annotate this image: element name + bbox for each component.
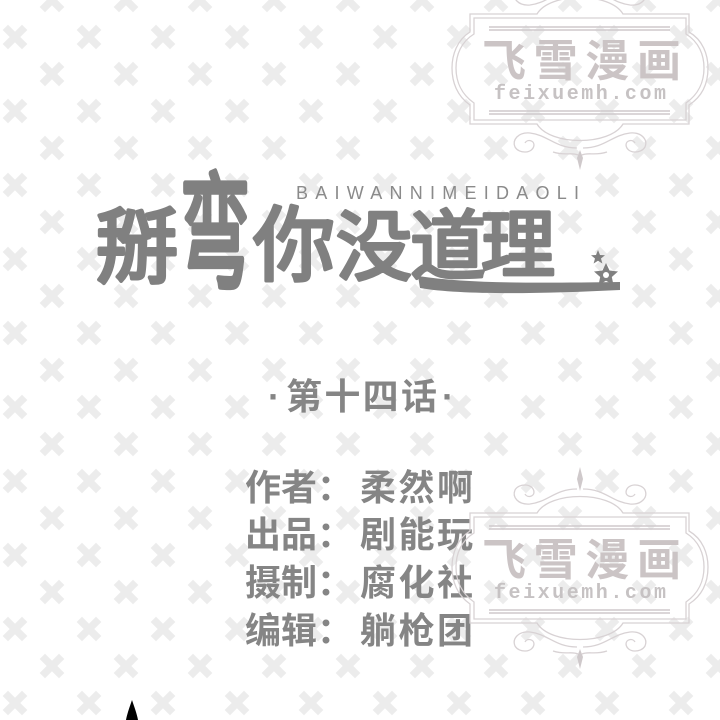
watermark: bottom: feixuemh.com	[494, 582, 666, 605]
icon: stars	[591, 250, 618, 285]
watermark: top: feixuemh.com	[494, 83, 666, 106]
title subtitle pinyin: BAIWANNIMEIDAOLI	[296, 183, 579, 203]
watermark: top	[452, 0, 708, 170]
credits block: 柔然啊	[360, 467, 473, 508]
credits block: 躺枪团	[360, 610, 473, 651]
title underline swoosh	[418, 276, 620, 293]
title character 你: 你	[253, 201, 335, 292]
watermark: top: 飞雪漫画	[482, 37, 681, 86]
title character 道: 道	[410, 205, 486, 290]
credits block: 腐化社	[360, 562, 473, 603]
title character 没: 没	[336, 206, 412, 291]
title character 理: 理	[481, 204, 555, 287]
black spike at bottom edge	[126, 700, 138, 720]
watermark: bottom	[452, 467, 708, 669]
episode heading: 第十四话	[286, 376, 437, 417]
episode heading: ·	[268, 376, 280, 417]
credit: editor: 编辑：	[245, 610, 353, 651]
credit: producer: 出品：	[245, 514, 353, 555]
credit: studio: 摄制：	[245, 562, 353, 603]
episode heading: ·	[442, 376, 454, 417]
title character 弯: 弯	[180, 166, 250, 304]
title character 掰: 掰	[96, 203, 178, 294]
title: logo lettering	[96, 166, 620, 304]
watermark: bottom: 飞雪漫画	[482, 536, 681, 585]
credits block	[245, 467, 473, 651]
credit: author: 作者：	[245, 467, 353, 508]
credits block: 剧能玩	[360, 514, 473, 555]
